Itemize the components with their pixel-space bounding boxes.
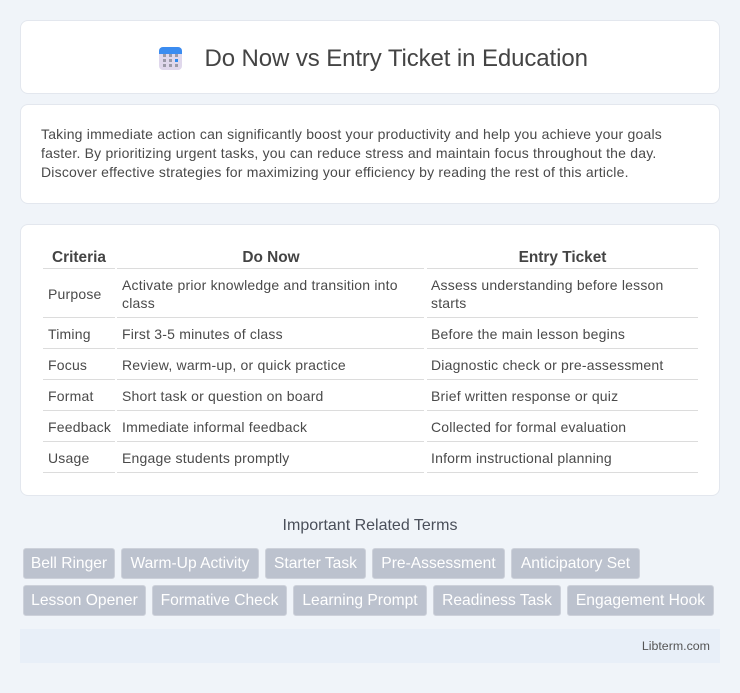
row: Timing: Timing bbox=[48, 326, 91, 342]
row: Focus: Review, warm-up, or quick practice bbox=[122, 357, 346, 373]
tags: related terms: Engagement Hook bbox=[576, 592, 705, 609]
row: Format: Brief written response or quiz bbox=[431, 388, 618, 404]
row: Feedback: Immediate informal feedback bbox=[122, 419, 307, 435]
row: Purpose: Activate prior knowledge and transition into bbox=[122, 277, 398, 293]
row: Usage: Usage bbox=[48, 450, 89, 466]
row: Timing: Before the main lesson begins bbox=[431, 326, 625, 342]
row: Feedback: Feedback bbox=[48, 419, 111, 435]
tags: related terms: Pre-Assessment bbox=[381, 555, 496, 572]
tags: related terms: Anticipatory Set bbox=[521, 555, 630, 572]
intro text bbox=[41, 126, 662, 180]
row: Purpose: Purpose bbox=[48, 286, 102, 302]
row: Purpose bbox=[48, 277, 664, 311]
row: Purpose: Assess understanding before lesson bbox=[431, 277, 664, 293]
row: Purpose: starts bbox=[431, 295, 466, 311]
row: Timing bbox=[48, 326, 625, 342]
panel: title bbox=[20, 20, 720, 94]
table header: Do Now bbox=[242, 249, 300, 266]
tags: related terms: Learning Prompt bbox=[302, 592, 418, 609]
row: Format bbox=[48, 388, 618, 404]
row: Timing: First 3-5 minutes of class bbox=[122, 326, 283, 342]
tags: related terms: Readiness Task bbox=[442, 592, 552, 609]
heading: Do Now vs Entry Ticket in Education bbox=[204, 45, 588, 72]
row: Feedback: Collected for formal evaluation bbox=[431, 419, 626, 435]
row: Purpose: class bbox=[122, 295, 155, 311]
row: Focus bbox=[48, 357, 664, 373]
table header: Criteria bbox=[52, 249, 106, 266]
row: Focus: Diagnostic check or pre-assessment bbox=[431, 357, 663, 373]
footer credit: Libterm.com bbox=[642, 639, 710, 653]
table header: Entry Ticket bbox=[519, 249, 606, 266]
intro text: Taking immediate action can significantly boost your productivity and help you achieve your goals bbox=[41, 126, 662, 142]
intro text: Discover effective strategies for maximizing your efficiency by reading the rest of this article. bbox=[41, 164, 629, 180]
tags: related terms: Formative Check bbox=[161, 592, 278, 609]
footer bbox=[20, 629, 720, 663]
panel: comparison table bbox=[20, 224, 720, 496]
row: Usage bbox=[48, 450, 612, 466]
row: Focus: Focus bbox=[48, 357, 87, 373]
row: Usage: Inform instructional planning bbox=[431, 450, 612, 466]
tags: related terms: Starter Task bbox=[274, 555, 357, 572]
icon: calendar bbox=[159, 47, 182, 70]
row: Usage: Engage students promptly bbox=[122, 450, 289, 466]
row: Format: Short task or question on board bbox=[122, 388, 324, 404]
tags: related terms bbox=[23, 548, 714, 616]
tags: related terms: Bell Ringer bbox=[31, 555, 107, 572]
row: Feedback bbox=[48, 419, 626, 435]
intro text: faster. By prioritizing urgent tasks, you can reduce stress and maintain focus throughout the day. bbox=[41, 145, 656, 161]
table header bbox=[52, 249, 606, 266]
tags: related terms: Warm-Up Activity bbox=[130, 555, 249, 572]
tags: related terms: Lesson Opener bbox=[31, 592, 138, 609]
panel: introduction bbox=[20, 104, 720, 204]
row: Format: Format bbox=[48, 388, 94, 404]
heading: related terms: Important Related Terms bbox=[283, 517, 457, 534]
